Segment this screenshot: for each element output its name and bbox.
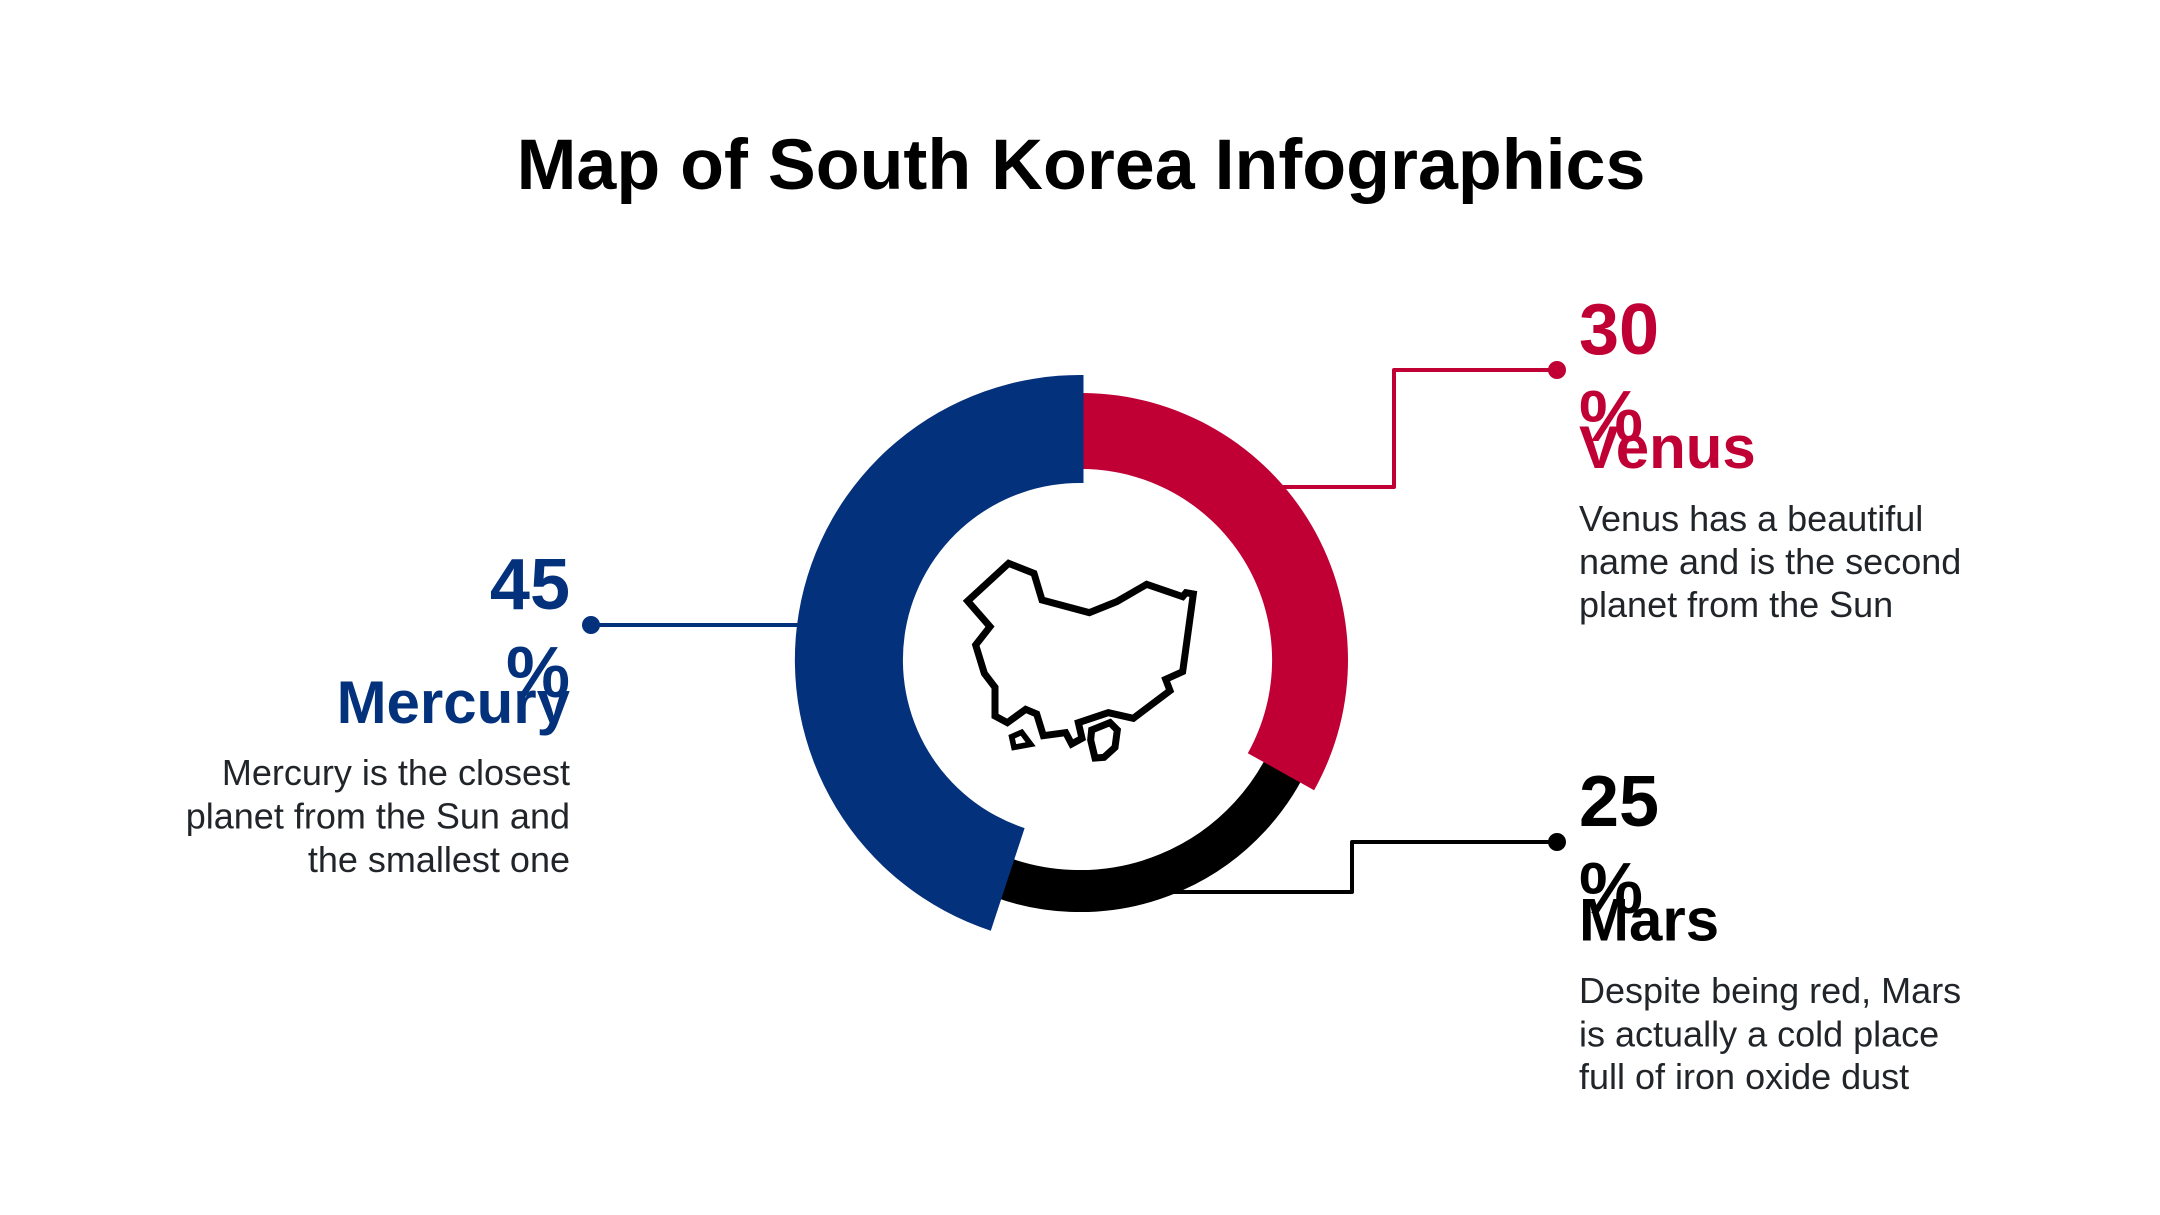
heading: Venus: Venus [1579,414,1756,481]
description: Venus: name and is the second [1579,541,1961,582]
text block: Mars [1579,762,1961,1097]
percentage: 45%: % [506,633,570,713]
description: Mars: full of iron oxide dust [1579,1056,1909,1097]
connector: Mercury [582,616,805,634]
segment: Mercury 45% [795,375,1084,931]
description: Mercury: the smallest one [308,839,570,880]
heading: Mars: Mars [1579,886,1719,954]
percentage: 30%: % [1579,377,1643,457]
description: Mercury: Mercury is the closest [222,752,570,793]
percentage: 30%: 30 [1579,290,1659,370]
description: Mercury: planet from the Sun and [186,796,570,836]
heading: Mercury: Mercury [337,669,571,736]
description: Venus: planet from the Sun [1579,584,1893,625]
connector: Venus [1281,361,1566,487]
description: Venus: Venus has a beautiful [1579,498,1923,539]
icon: map of South Korea [968,563,1193,758]
title: Map of South Korea Infographics [517,125,1645,205]
percentage: 25%: 25 [1579,762,1659,842]
description: Mars: is actually a cold place [1579,1014,1939,1054]
text block: Venus [1579,290,1961,625]
percentage: 25%: % [1579,849,1643,929]
connector: Mars [1160,833,1566,892]
segment: Venus 30% [1084,393,1348,790]
text block: Mercury [186,545,571,880]
percentage: 45%: 45 [490,545,570,625]
segment: Mars 25% [982,739,1297,891]
description: Mars: Despite being red, Mars [1579,970,1961,1011]
donut chart [582,361,1566,931]
